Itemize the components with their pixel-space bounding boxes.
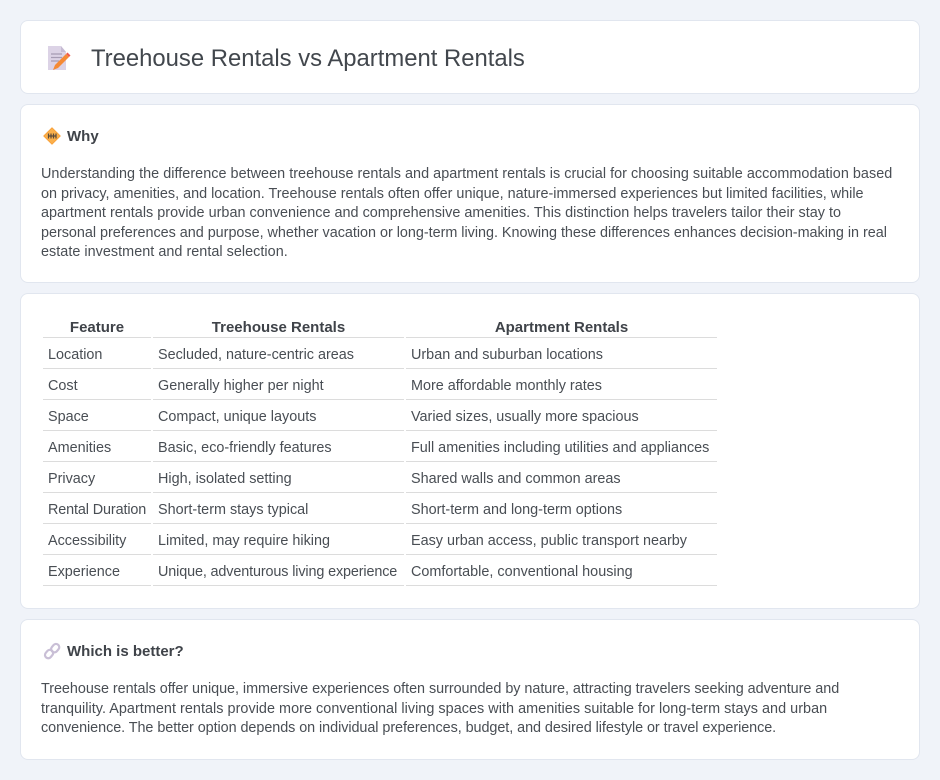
comparison table: Basic, eco-friendly features <box>158 440 332 456</box>
panel: why <box>20 104 920 283</box>
comparison table: More affordable monthly rates <box>411 378 602 394</box>
comparison table: Short-term stays typical <box>158 502 308 518</box>
icon: chain link <box>44 642 60 660</box>
comparison table: Full amenities including utilities and appliances <box>411 440 709 456</box>
comparison table: High, isolated setting <box>158 471 292 487</box>
text block: which is better: convenience. The better option depends on individual preferences, budget, and desired lifestyle or travel experience. <box>41 720 776 736</box>
comparison table: Unique, adventurous living experience <box>158 564 397 580</box>
comparison table: Experience <box>48 564 120 580</box>
comparison table: Location <box>48 347 102 363</box>
comparison table: Accessibility <box>48 533 126 549</box>
comparison table: Privacy <box>48 471 95 487</box>
icon: memo with pencil <box>48 46 70 70</box>
comparison table: Urban and suburban locations <box>411 347 603 363</box>
comparison table: Cost <box>48 378 78 394</box>
text block: why: on privacy, amenities, and location. Treehouse rentals often offer unique, nature-immersed experiences but limited facilities, while <box>41 186 864 202</box>
comparison table <box>43 319 717 586</box>
heading: why: Why <box>67 128 99 145</box>
text block: which is better: tranquility. Apartment rentals provide more conventional living spaces with amenities suitable for long-term stays and urban <box>41 701 827 717</box>
text block: why: estate investment and rental selection. <box>41 244 288 260</box>
comparison table: Short-term and long-term options <box>411 502 622 518</box>
text block: which is better <box>41 681 839 736</box>
text block: why: personal preferences and purpose, whether vacation or long-term living. Knowing these differences enhances decision-making in real <box>41 225 887 241</box>
comparison table: Varied sizes, usually more spacious <box>411 409 639 425</box>
comparison table: Secluded, nature-centric areas <box>158 347 354 363</box>
icon: diamond road sign <box>43 127 61 145</box>
comparison table: Space <box>48 409 89 425</box>
comparison table: Limited, may require hiking <box>158 533 330 549</box>
comparison table: Comfortable, conventional housing <box>411 564 633 580</box>
heading: which is better: Which is better? <box>67 643 184 660</box>
panel: which is better <box>20 619 920 760</box>
comparison table: Easy urban access, public transport nearby <box>411 533 687 549</box>
panel: title <box>20 20 920 94</box>
comparison table: Generally higher per night <box>158 378 324 394</box>
comparison table: Apartment Rentals <box>495 319 628 336</box>
comparison table: Treehouse Rentals <box>212 319 345 336</box>
text block: which is better: Treehouse rentals offer unique, immersive experiences often surrounded by nature, attracting travelers seeking adventure and <box>41 681 839 697</box>
panel: comparison table <box>20 293 920 609</box>
comparison table: Rental Duration <box>48 502 146 518</box>
title: Treehouse Rentals vs Apartment Rentals <box>91 45 525 72</box>
text block: why: apartment rentals provide urban convenience and comprehensive amenities. This distinction helps travelers tailor their stay to <box>41 205 841 221</box>
comparison table: Shared walls and common areas <box>411 471 621 487</box>
text block: why: Understanding the difference between treehouse rentals and apartment rentals is crucial for choosing suitable accommodation based <box>41 166 892 182</box>
comparison table: Feature <box>70 319 124 336</box>
comparison table: Compact, unique layouts <box>158 409 316 425</box>
comparison table: Amenities <box>48 440 111 456</box>
text block: why <box>41 166 892 260</box>
